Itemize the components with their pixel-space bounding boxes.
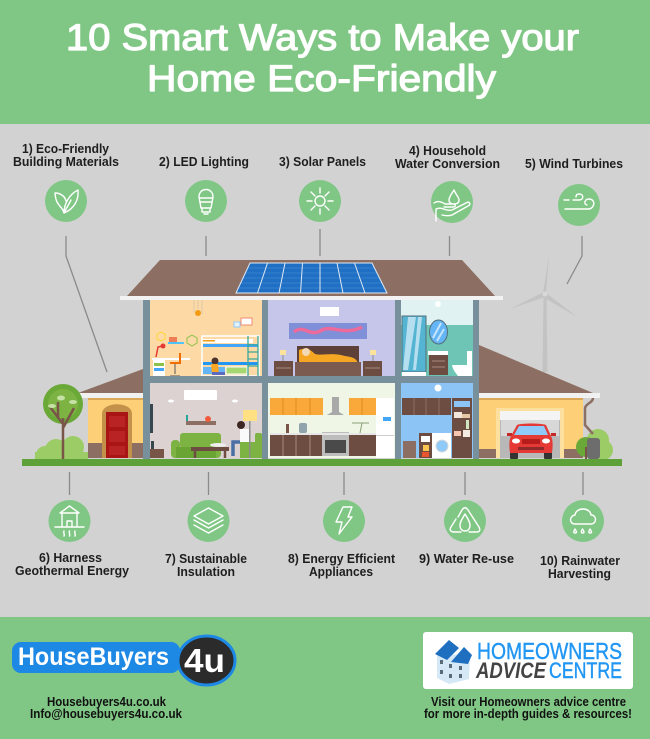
- room: bathroom: [401, 300, 473, 376]
- left wing: [71, 369, 143, 458]
- label 10: rainwater: Harvesting: [548, 566, 611, 581]
- icon 8: lightning bolt: [323, 500, 365, 542]
- ground: [22, 459, 622, 466]
- header band with title: [0, 0, 650, 124]
- wind turbine: [510, 255, 577, 372]
- contact details: Housebuyers4u.co.uk: [47, 695, 166, 709]
- logo: HouseBuyers4u: HouseBuyers: [18, 643, 169, 671]
- room: main bedroom: [268, 300, 395, 376]
- solar panels: [236, 263, 387, 293]
- logo: HouseBuyers4u: 4u: [184, 642, 225, 679]
- label 4: water conversion: 4) Household: [409, 143, 486, 158]
- label 2: LED lighting: 2) LED Lighting: [159, 154, 249, 169]
- header band with title: 10 Smart Ways to Make your: [66, 16, 579, 58]
- logo card: Homeowners Advice Centre: ADVICE: [475, 658, 547, 683]
- tree and bushes: [35, 384, 88, 464]
- logo card: Homeowners Advice Centre: CENTRE: [549, 658, 622, 683]
- room: living room: [150, 383, 262, 458]
- rain barrel and bushes: [576, 398, 613, 460]
- label 9: water re-use: 9) Water Re-use: [419, 551, 514, 566]
- icon 3: sun: [299, 180, 341, 222]
- room: kitchen: [268, 383, 395, 458]
- logo card: Homeowners Advice Centre: [423, 632, 633, 689]
- red car: [507, 424, 556, 459]
- icon: blue house: [435, 640, 472, 684]
- room: laundry: [401, 383, 473, 458]
- icon 7: insulation layers: [188, 500, 230, 542]
- label 4: water conversion: Water Conversion: [395, 156, 500, 171]
- icon 9: water recycle: [444, 500, 486, 542]
- label 6: geothermal: 6) Harness: [39, 550, 102, 565]
- label 7: insulation: Insulation: [177, 564, 235, 579]
- label 6: geothermal: Geothermal Energy: [15, 563, 130, 578]
- roof: [127, 260, 495, 296]
- icon 4: hand with water drop: [431, 181, 473, 223]
- house: [22, 260, 622, 466]
- icon 6: geothermal house: [48, 500, 90, 542]
- structural walls: [143, 300, 479, 459]
- connector lines: [66, 229, 583, 495]
- label 10: rainwater: 10) Rainwater: [540, 553, 620, 568]
- label 1: building materials: Building Materials: [13, 154, 119, 169]
- eave: [120, 296, 503, 300]
- logo card: Homeowners Advice Centre: HOMEOWNERS: [477, 638, 622, 664]
- label 3: solar panels: 3) Solar Panels: [279, 154, 366, 169]
- contact details: Info@housebuyers4u.co.uk: [30, 707, 182, 721]
- icon 2: light bulb: [185, 180, 227, 222]
- label 7: insulation: 7) Sustainable: [165, 551, 247, 566]
- icon 5: wind: [558, 184, 600, 226]
- label 8: appliances: Appliances: [309, 564, 373, 579]
- label 8: appliances: 8) Energy Efficient: [288, 551, 396, 566]
- logo: HouseBuyers4u: [12, 636, 235, 685]
- header band with title: Home Eco-Friendly: [147, 57, 496, 99]
- right wing and garage: [479, 345, 600, 458]
- label 1: building materials: 1) Eco-Friendly: [22, 141, 110, 156]
- advice centre text: Visit our Homeowners advice centre: [431, 695, 626, 709]
- advice centre text: for more in-depth guides & resources!: [424, 707, 632, 721]
- icon 10: rain cloud: [562, 500, 604, 542]
- footer band: [0, 617, 650, 739]
- room: kids bedroom: [150, 300, 262, 376]
- icon 1: leaves: [45, 180, 87, 222]
- label 5: wind turbines: 5) Wind Turbines: [525, 156, 623, 171]
